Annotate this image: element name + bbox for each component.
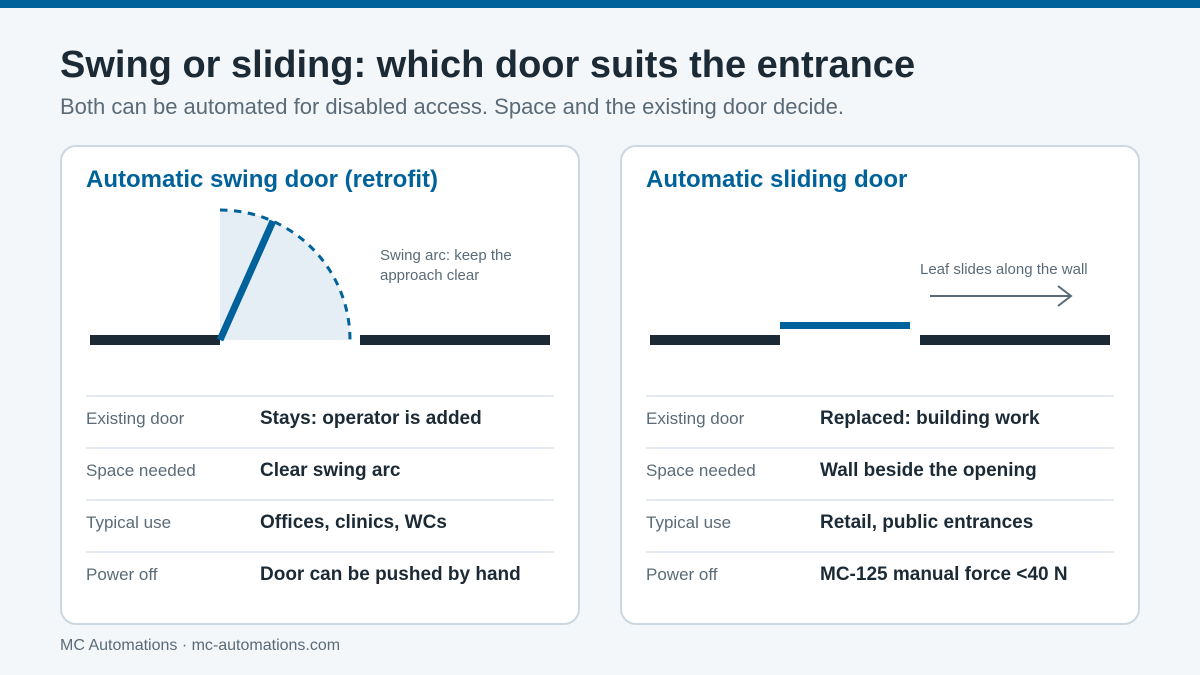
row: typical use	[86, 499, 554, 551]
row: power off	[646, 551, 1114, 603]
title: Swing or sliding: which door suits the entrance	[60, 44, 915, 86]
row: power off: MC-125 manual force <40 N	[820, 564, 1068, 585]
row: power off: Power off	[646, 565, 718, 584]
diagram: sliding door plan view	[650, 261, 1110, 345]
slide annotation: Leaf slides along the wall	[920, 261, 1088, 278]
row: space needed	[86, 447, 554, 499]
row: existing door: Stays: operator is added	[260, 408, 482, 429]
diagram: swing door plan view	[90, 208, 550, 345]
row: power off	[86, 551, 554, 603]
sliding leaf	[780, 322, 910, 329]
row: space needed: Wall beside the opening	[820, 460, 1037, 481]
row: power off: Power off	[86, 565, 158, 584]
swing arc annotation: Swing arc: keep the	[380, 247, 512, 264]
row: power off: Door can be pushed by hand	[260, 564, 521, 585]
panel heading: sliding door: Automatic sliding door	[646, 166, 907, 193]
row: typical use	[646, 499, 1114, 551]
footer credit: MC Automations · mc-automations.com	[60, 637, 340, 654]
slide direction arrow	[930, 286, 1071, 306]
swing arc area	[220, 210, 350, 340]
swing arc dashed outline	[220, 210, 350, 340]
swing arc annotation: approach clear	[380, 267, 479, 284]
row: space needed: Space needed	[86, 461, 196, 480]
row: space needed: Clear swing arc	[260, 460, 400, 481]
row: existing door: Existing door	[86, 409, 184, 428]
right wall	[920, 335, 1110, 345]
row: existing door: Existing door	[646, 409, 744, 428]
right wall	[360, 335, 550, 345]
row: space needed: Space needed	[646, 461, 756, 480]
left wall	[650, 335, 780, 345]
subtitle: Both can be automated for disabled access. Space and the existing door decide.	[60, 94, 844, 119]
row: existing door: Replaced: building work	[820, 408, 1040, 429]
top accent bar	[0, 0, 1200, 8]
row: typical use: Typical use	[86, 513, 171, 532]
panel: automatic swing door	[60, 145, 580, 625]
left wall	[90, 335, 220, 345]
panel: automatic sliding door	[620, 145, 1140, 625]
row: typical use: Typical use	[646, 513, 731, 532]
door leaf	[220, 221, 273, 340]
row: space needed	[646, 447, 1114, 499]
row: typical use: Offices, clinics, WCs	[260, 512, 447, 533]
row: typical use: Retail, public entrances	[820, 512, 1033, 533]
panel heading: swing door: Automatic swing door (retrofit)	[86, 166, 438, 193]
row: existing door	[86, 395, 554, 447]
row: existing door	[646, 395, 1114, 447]
